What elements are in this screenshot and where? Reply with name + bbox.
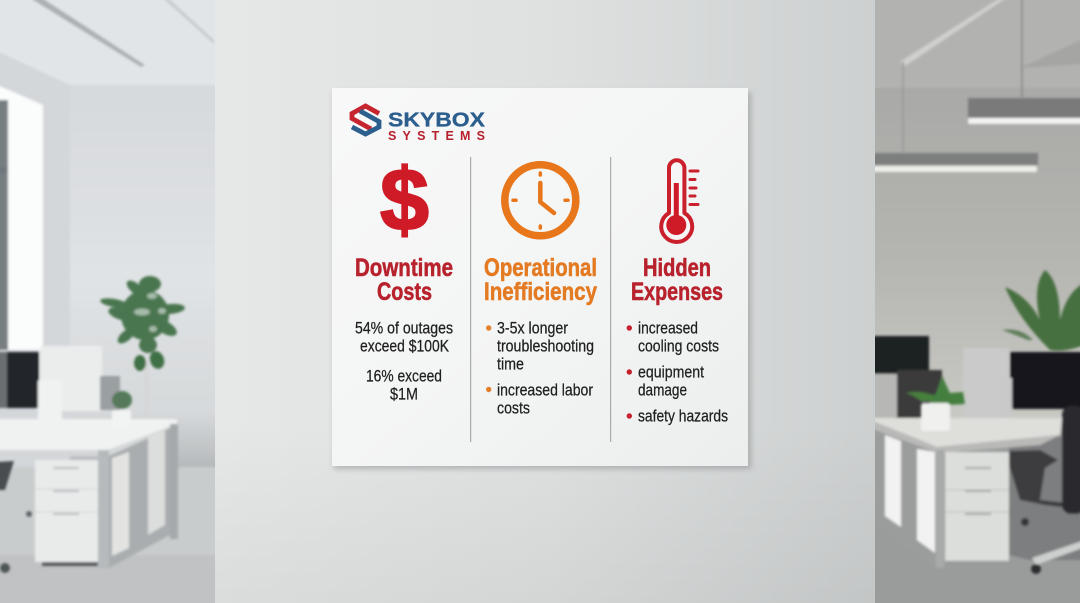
bullet list: expense items: cooling costs bbox=[638, 338, 719, 356]
heading: downtime costs: Costs bbox=[377, 278, 432, 306]
heading: operational inefficiency: Inefficiency bbox=[484, 278, 597, 306]
heading: downtime costs: Downtime bbox=[355, 254, 453, 282]
left plant bbox=[100, 276, 185, 420]
text: outage statistics: 54% of outages bbox=[355, 320, 453, 338]
column: operational inefficiency bbox=[484, 165, 597, 418]
bullet list: inefficiency items: costs bbox=[497, 400, 530, 418]
column: hidden expenses bbox=[627, 160, 728, 426]
left desk with monitors and drawers bbox=[0, 346, 178, 573]
bullet list: expense items: equipment bbox=[638, 364, 704, 382]
icon: clock bbox=[505, 165, 576, 236]
logo wordmark: SKYBOX bbox=[388, 108, 485, 132]
text: outage statistics bbox=[355, 320, 453, 404]
right desk with monitors, chair and drawers bbox=[870, 336, 1080, 574]
logo subtitle: SYSTEMS bbox=[388, 129, 485, 143]
column divider right bbox=[610, 157, 611, 442]
heading: hidden expenses bbox=[631, 254, 723, 306]
pendant light upper bbox=[968, 98, 1080, 124]
infographic panel bbox=[332, 88, 748, 466]
column divider left bbox=[470, 157, 471, 442]
panel shadow bbox=[334, 92, 751, 469]
icon: thermometer bbox=[661, 160, 698, 242]
bullet list: inefficiency items: time bbox=[497, 356, 524, 374]
text: outage statistics: $1M bbox=[390, 386, 418, 404]
left office background bbox=[0, 0, 220, 603]
logo: Skybox Systems bbox=[352, 106, 485, 143]
bullet list: expense items: increased bbox=[638, 320, 698, 338]
right desk potted plant bbox=[906, 376, 965, 431]
bullet list: expense items: damage bbox=[638, 382, 687, 400]
heading: operational inefficiency: Operational bbox=[484, 254, 597, 282]
column: downtime costs bbox=[355, 150, 453, 404]
icon: dollar sign: $ bbox=[380, 150, 429, 249]
heading: operational inefficiency bbox=[484, 254, 597, 306]
right office background bbox=[870, 0, 1080, 603]
text: outage statistics: 16% exceed bbox=[366, 368, 442, 386]
bullet list: inefficiency items: 3-5x longer bbox=[497, 320, 568, 338]
bullet list: inefficiency items bbox=[486, 320, 594, 418]
central wall bbox=[215, 0, 875, 603]
right plant bbox=[1002, 270, 1080, 351]
bullet list: inefficiency items: increased labor bbox=[497, 382, 593, 400]
bullet list: expense items: safety hazards bbox=[638, 408, 728, 426]
pendant light lower bbox=[870, 153, 1038, 172]
heading: hidden expenses: Expenses bbox=[631, 278, 723, 306]
bullet list: inefficiency items: troubleshooting bbox=[497, 338, 594, 356]
logo hexagon icon bbox=[352, 106, 379, 134]
heading: downtime costs bbox=[355, 254, 453, 306]
heading: hidden expenses: Hidden bbox=[643, 254, 711, 282]
text: outage statistics: exceed $100K bbox=[360, 338, 449, 356]
bullet list: expense items bbox=[627, 320, 728, 426]
